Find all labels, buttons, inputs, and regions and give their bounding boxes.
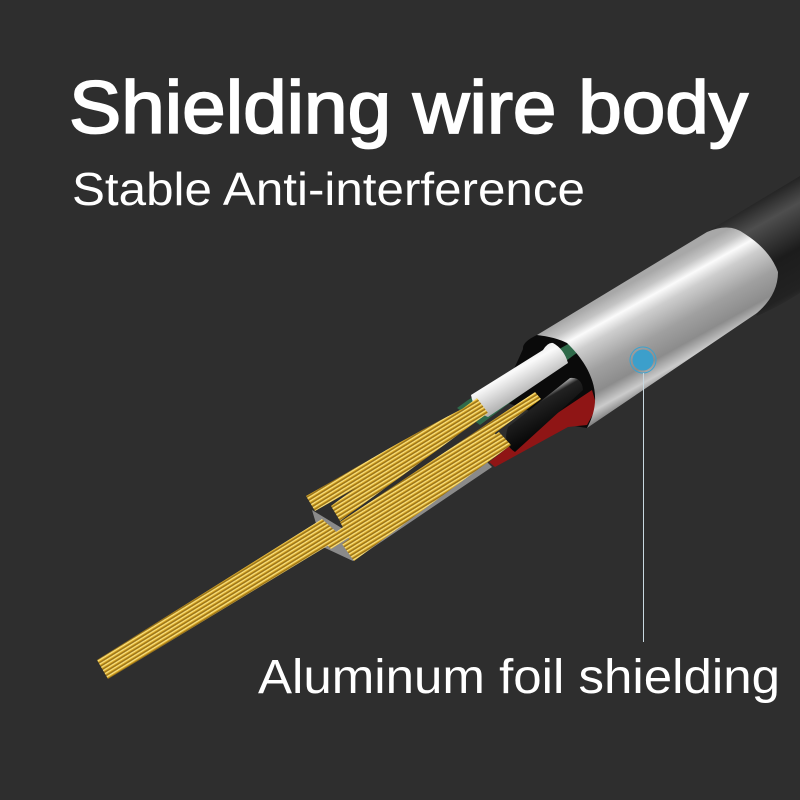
gold strand bundle: thin crossing [340, 392, 541, 540]
gold strand bundle: center [331, 398, 488, 521]
callout marker [630, 347, 656, 373]
aluminum foil shield [537, 227, 778, 428]
subtitle: Stable Anti-interference [72, 163, 585, 215]
cable opening interior [500, 335, 605, 428]
gold strand bundle: lower [342, 432, 511, 561]
gold strand bundle: rear lower [323, 425, 500, 549]
gold strand bundle: long front [97, 519, 342, 679]
black wire [506, 378, 583, 452]
callout label: Aluminum foil shielding [258, 651, 780, 704]
gold strand bundle: upper [306, 405, 478, 511]
white insulated tube [471, 343, 568, 417]
callout dot ring [630, 347, 656, 373]
title: Shielding wire body [69, 66, 748, 149]
gray backing under strands [312, 455, 492, 561]
callout dot [632, 350, 654, 370]
black outer jacket [707, 176, 800, 316]
green inner wire [457, 343, 578, 425]
red wire [489, 390, 597, 467]
callout line [642, 373, 644, 642]
cable illustration [97, 176, 800, 679]
